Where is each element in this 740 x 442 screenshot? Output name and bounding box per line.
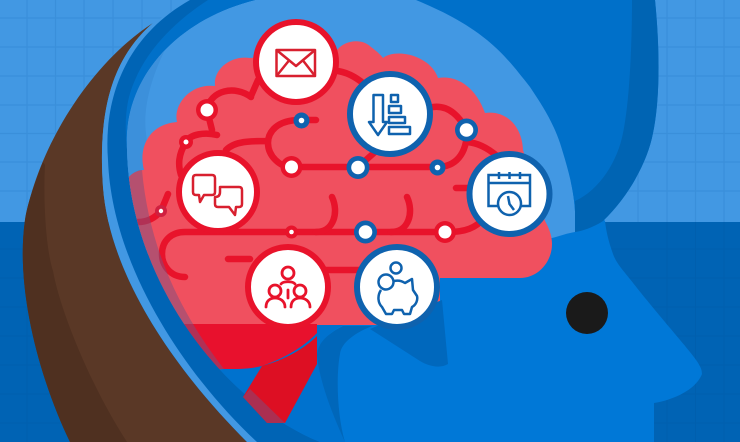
icon: people group <box>248 247 328 327</box>
dome inner crescent <box>126 51 164 177</box>
icon: sort descending <box>350 74 430 154</box>
icon: piggy bank <box>357 247 437 327</box>
node: small red 2 <box>155 205 167 217</box>
dark blue head ring <box>107 0 340 442</box>
icon: envelope <box>256 22 336 102</box>
node: small red 3 <box>285 226 298 238</box>
neck crescent shadow <box>317 326 372 442</box>
light rim of the head <box>102 0 300 442</box>
brain stem <box>243 336 317 423</box>
icon: calendar clock <box>470 154 550 234</box>
icon: chat bubbles <box>179 153 257 231</box>
dark hair cap <box>416 0 659 232</box>
node: white red 2 <box>280 156 302 178</box>
ring inner lighter band <box>126 0 255 150</box>
brain <box>100 41 552 375</box>
lens tint over brain edge <box>129 170 224 370</box>
node: small blue 1 <box>294 112 310 128</box>
eye <box>566 292 608 334</box>
piggy shadow <box>370 300 448 367</box>
brain lobes <box>110 41 552 325</box>
head interior, lower <box>127 0 702 442</box>
node: small blue 2 <box>430 160 446 176</box>
brain lower cerebellum <box>184 324 317 369</box>
node: blue 1 <box>346 156 370 179</box>
node: white red 1 <box>196 99 218 121</box>
node: blue 2 <box>455 118 478 142</box>
hair <box>23 23 247 442</box>
node: blue 3 <box>354 220 377 244</box>
nerve lines <box>138 71 497 277</box>
neck lower shadow <box>221 325 344 442</box>
node: small red 1 <box>179 135 193 149</box>
node: white red 3 <box>434 221 456 243</box>
light dome interior <box>120 0 575 255</box>
